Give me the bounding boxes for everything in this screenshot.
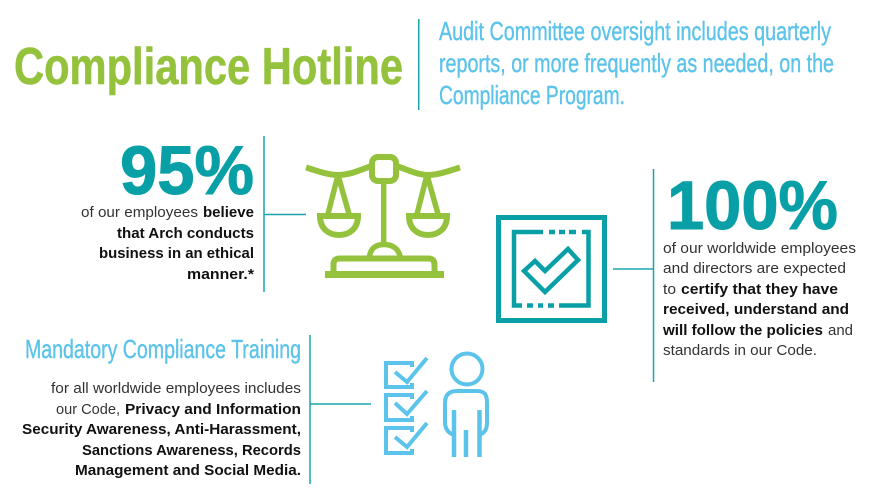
text: 100% description: of our worldwide employees xyxy=(663,240,856,257)
text: 100% description xyxy=(662,240,856,359)
text: training description: Management and Social Media. xyxy=(75,462,301,479)
connector: training to icon xyxy=(310,335,371,484)
text: training description xyxy=(22,380,301,479)
heading: mandatory training: Mandatory Compliance Training xyxy=(25,334,301,364)
text: 100% description: will follow the policies xyxy=(662,322,823,339)
header text xyxy=(439,16,834,110)
text: 95% description: business in an ethical xyxy=(99,245,254,262)
stat: 95%: 95% xyxy=(120,132,254,209)
header divider xyxy=(418,19,420,110)
icon: person xyxy=(445,354,487,457)
text: 100% description: received, understand and xyxy=(663,301,849,318)
text: 100% description: and xyxy=(828,322,853,339)
icon: certificate checkbox xyxy=(498,218,604,320)
stat: 100%: 100% xyxy=(667,167,838,244)
text: 100% description: certify that they have xyxy=(681,281,838,298)
icon: scales xyxy=(306,157,460,278)
text: 95% description xyxy=(81,204,254,283)
text: training description: Privacy and Information xyxy=(125,401,301,418)
text: 95% description: of our employees xyxy=(81,204,198,221)
text: 100% description: standards in our Code. xyxy=(663,342,817,359)
text: training description: Security Awareness, Anti-Harassment, xyxy=(22,421,301,438)
icon: checklist xyxy=(386,358,427,453)
text: 100% description: to xyxy=(663,281,676,298)
text: 95% description: manner.* xyxy=(187,266,254,283)
connector: checkbox to 100% xyxy=(613,169,654,382)
text: 95% description: believe xyxy=(203,204,254,221)
title: Compliance Hotline xyxy=(14,38,403,96)
header text: Compliance Program. xyxy=(439,80,625,110)
connector: 95% to scales xyxy=(264,136,306,292)
text: training description: our Code, xyxy=(56,401,120,418)
text: training description: Sanctions Awareness, Records xyxy=(82,442,301,459)
text: 100% description: and directors are expected xyxy=(663,260,846,277)
text: 95% description: that Arch conducts xyxy=(117,225,254,242)
text: training description: for all worldwide employees includes xyxy=(51,380,301,397)
